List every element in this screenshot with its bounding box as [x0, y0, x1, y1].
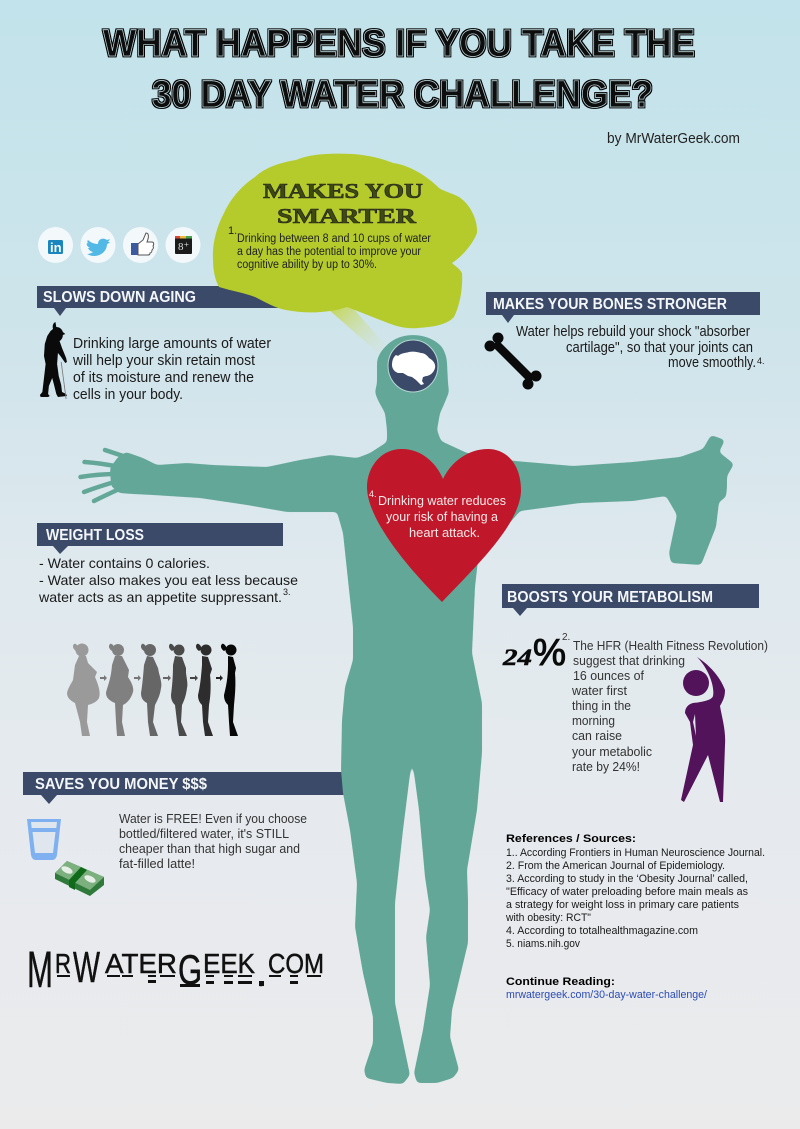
text: weight loss: 3. — [283, 587, 291, 597]
banner: slows down aging: SLOWS DOWN AGING — [43, 289, 196, 306]
heart — [367, 449, 521, 602]
title — [103, 23, 695, 116]
references heading: References / Sources: — [506, 833, 636, 845]
brain text: 1. — [228, 225, 237, 237]
banner: weight loss: WEIGHT LOSS — [46, 527, 144, 544]
logo: MrWaterGeek.com: . — [258, 969, 264, 991]
brain text: a day has the potential to improve your — [237, 246, 421, 258]
icon: stretching figure — [681, 657, 725, 802]
head medallion with brain — [388, 340, 438, 392]
icon: water glass — [27, 819, 61, 860]
text: metabolism — [562, 632, 768, 774]
heart text: Drinking water reduces — [378, 493, 506, 508]
logo: MrWaterGeek.com: R — [55, 948, 71, 979]
icon: elderly man — [40, 322, 67, 399]
text: bones: 4. — [757, 356, 765, 366]
text: slows down aging: will help your skin retain most — [72, 353, 255, 369]
brain heading: SMARTER — [277, 204, 417, 228]
heart text: 4. — [369, 489, 377, 499]
heart text: your risk of having a — [386, 509, 499, 524]
text: metabolism: 2. — [562, 632, 570, 643]
text: saves you money: fat-filled latte! — [119, 857, 195, 871]
icon: linkedin: in — [50, 240, 62, 255]
logo: MrWaterGeek.com: G — [178, 946, 202, 993]
figure 6 — [221, 644, 238, 736]
byline: by MrWaterGeek.com — [607, 130, 740, 147]
text: metabolism: can raise — [572, 728, 622, 743]
weight loss silhouettes — [67, 644, 238, 736]
logo: MrWaterGeek.com: ATER — [105, 948, 177, 979]
text: bones: Water helps rebuild your shock "absorber — [516, 324, 750, 340]
banner: boosts your metabolism — [502, 584, 759, 616]
references: 3. According to study in the ‘Obesity Journal’ called, — [506, 873, 748, 885]
text: saves you money: bottled/filtered water, it's STILL — [119, 827, 289, 841]
icon: bone — [484, 332, 542, 390]
social icons — [38, 227, 200, 263]
text: metabolism: morning — [572, 713, 615, 728]
arrows — [100, 675, 223, 681]
text: slows down aging: Drinking large amounts of water — [73, 336, 271, 352]
text: metabolism: water first — [571, 683, 627, 698]
continue reading — [506, 976, 708, 1001]
text: metabolism: your metabolic — [572, 744, 652, 759]
references: 1.. According Frontiers in Human Neuroscience Journal. — [506, 847, 765, 859]
icon: thumbs up — [131, 233, 154, 255]
references: 5. niams.nih.gov — [506, 938, 580, 950]
icon: google plus: 8⁺ — [178, 241, 190, 253]
text: saves you money: cheaper than that high sugar and — [119, 842, 300, 856]
references — [505, 833, 765, 950]
logo: MrWaterGeek.com: W — [73, 943, 100, 992]
figure 2 — [106, 644, 133, 736]
figure 1 — [67, 644, 100, 736]
text: metabolism: 16 ounces of — [573, 668, 644, 683]
references: 2. From the American Journal of Epidemiology. — [506, 860, 725, 872]
banner: boosts your metabolism: BOOSTS YOUR METABOLISM — [507, 589, 713, 606]
text: weight loss — [38, 555, 298, 605]
logo: MrWaterGeek.com — [27, 941, 324, 998]
stat: 24 percent — [502, 632, 566, 673]
left hand fingers — [80, 450, 135, 501]
text: bones — [516, 324, 765, 371]
logo: MrWaterGeek.com: COM — [268, 948, 324, 979]
banner: slows down aging — [37, 286, 300, 316]
banner: weight loss — [37, 523, 283, 554]
brain text: Drinking between 8 and 10 cups of water — [237, 233, 431, 245]
figure 4 — [169, 644, 187, 736]
banner: bones — [486, 292, 760, 323]
heart text — [369, 489, 506, 540]
references: a strategy for weight loss in primary care patients — [506, 899, 739, 911]
text: saves you money — [119, 812, 307, 871]
icon: twitter — [87, 239, 110, 256]
body silhouette — [80, 335, 734, 1084]
text: metabolism: suggest that drinking — [573, 653, 685, 668]
text: metabolism: rate by 24%! — [572, 759, 640, 774]
continue reading: mrwatergeek.com/30-day-water-challenge/ — [506, 989, 708, 1001]
references: "Efficacy of water preloading before main meals as — [506, 886, 748, 898]
stat: 24 percent: % — [533, 632, 566, 673]
brain heading: MAKES YOU — [263, 179, 423, 203]
references: with obesity: RCT" — [505, 912, 591, 924]
banner: saves you money: SAVES YOU MONEY $$$ — [35, 776, 207, 793]
text: weight loss: water acts as an appetite suppressant. — [38, 589, 282, 605]
heart text: heart attack. — [409, 525, 480, 540]
text: weight loss: - Water also makes you eat less because — [39, 572, 298, 588]
stat: 24 percent: 24 — [502, 645, 532, 670]
references: 4. According to totalhealthmagazine.com — [506, 925, 698, 937]
logo: MrWaterGeek.com: M — [27, 941, 53, 998]
banner: saves you money — [23, 772, 345, 804]
brain text — [228, 225, 431, 271]
title: WHAT HAPPENS IF YOU TAKE THE — [103, 23, 695, 65]
logo: MrWaterGeek.com: EEK — [203, 948, 255, 979]
continue reading: Continue Reading: — [506, 976, 615, 988]
figure 5 — [196, 644, 213, 736]
icon: money stack — [55, 861, 104, 896]
icon: brain — [392, 352, 435, 385]
title: 30 DAY WATER CHALLENGE? — [152, 74, 653, 116]
text: slows down aging: of its moisture and renew the — [73, 370, 254, 386]
brain beam — [328, 305, 390, 358]
speech brain: makes you smarter — [213, 154, 477, 328]
icon: google plus — [175, 236, 192, 254]
text: bones: move smoothly. — [668, 355, 756, 371]
text: saves you money: Water is FREE! Even if you choose — [119, 812, 307, 826]
figure 3 — [141, 644, 161, 736]
text: weight loss: - Water contains 0 calories. — [39, 555, 210, 571]
text: slows down aging — [72, 336, 271, 403]
text: slows down aging: cells in your body. — [73, 387, 183, 403]
text: metabolism: thing in the — [572, 698, 631, 713]
banner: bones: MAKES YOUR BONES STRONGER — [493, 296, 727, 313]
brain heading — [263, 179, 423, 228]
brain text: cognitive ability by up to 30%. — [237, 259, 377, 271]
text: bones: cartilage", so that your joints can — [566, 340, 753, 356]
text: metabolism: The HFR (Health Fitness Revolution) — [573, 638, 768, 653]
